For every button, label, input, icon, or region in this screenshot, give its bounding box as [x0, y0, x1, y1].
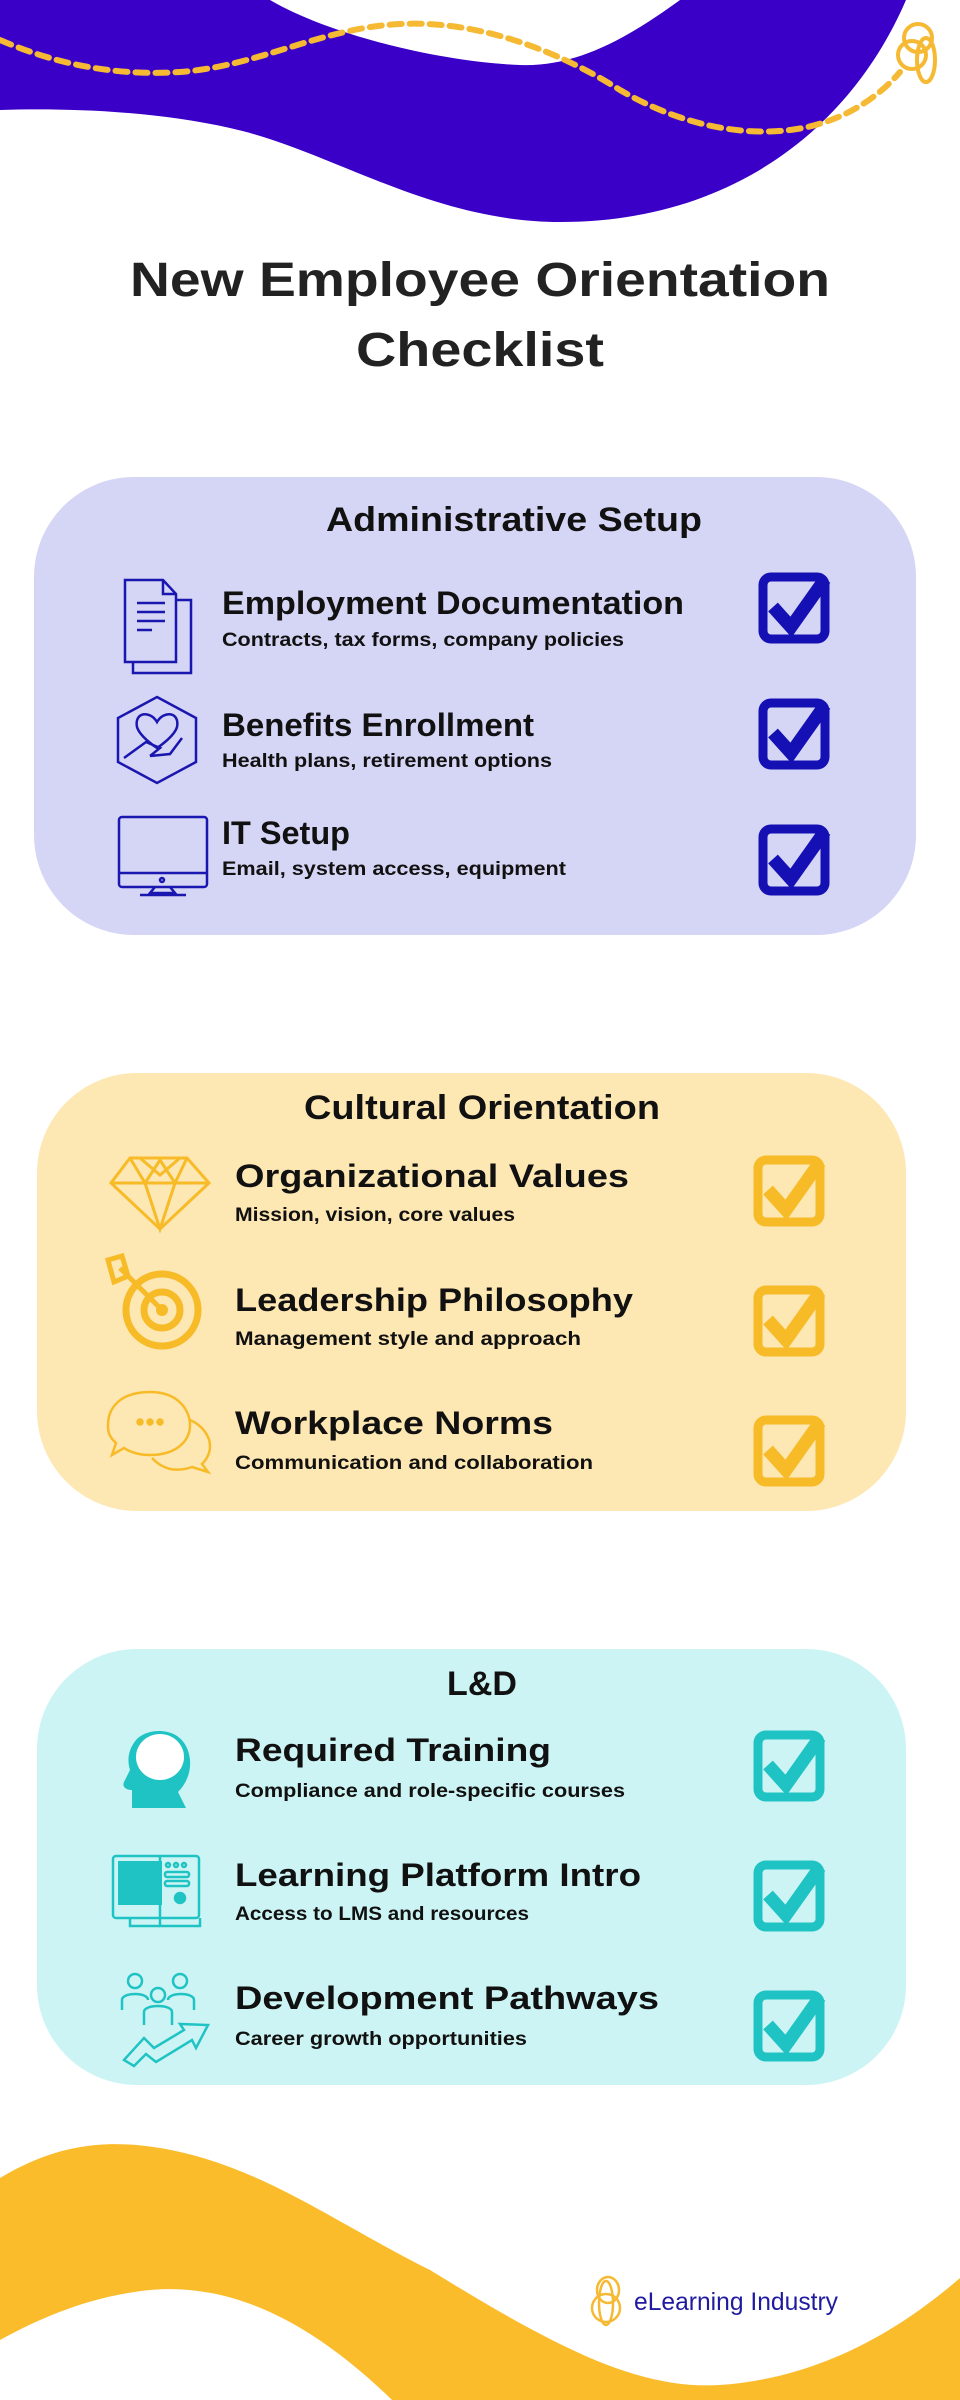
dashed path line: [0, 24, 900, 132]
text: workplace norms: Workplace Norms: [235, 1405, 553, 1441]
text: benefits enrollment: Benefits Enrollment: [222, 707, 534, 743]
icon: head: [123, 1731, 190, 1808]
panel: cultural orientation: Communication and collaboration: [235, 1453, 593, 1474]
panel: administrative setup: Contracts, tax forms, company policies: [222, 630, 624, 651]
text: employment documentation: Employment Documentation: [222, 585, 684, 621]
logo: eLearning Industry: [592, 2277, 838, 2325]
panel: administrative setup: [34, 477, 916, 935]
text: learning platform intro: Learning Platform Intro: [235, 1857, 641, 1893]
panel: L&D: [37, 1649, 906, 2085]
icon: people with growth arrow: [122, 1974, 208, 2066]
icon: top logo rings: [898, 24, 935, 82]
checkboxes: [758, 1160, 820, 1482]
panel: cultural orientation: Management style and approach: [235, 1329, 581, 1350]
text: organizational values: Organizational Values: [235, 1158, 629, 1194]
icon: target with arrow: [108, 1256, 198, 1346]
icon: heart in hand: [118, 697, 196, 783]
title: New Employee Orientation: [130, 254, 830, 307]
panel: L&D: Compliance and role-specific courses: [235, 1781, 625, 1802]
panel: administrative setup: Email, system access, equipment: [222, 859, 567, 880]
icon: document: [125, 580, 191, 673]
text: required training: Required Training: [235, 1732, 551, 1768]
panel: L&D: Access to LMS and resources: [235, 1904, 529, 1925]
text: leadership philosophy: Leadership Philosophy: [235, 1282, 633, 1318]
heading: cultural orientation: Cultural Orientation: [304, 1089, 660, 1127]
title: [130, 254, 830, 377]
bottom yellow wave: [0, 2144, 960, 2400]
panel: L&D: Career growth opportunities: [235, 2029, 527, 2050]
text: it setup: IT Setup: [222, 815, 350, 851]
title: Checklist: [356, 324, 604, 377]
text: development pathways: Development Pathways: [235, 1980, 659, 2016]
icon: speech bubbles: [108, 1392, 210, 1472]
panel: administrative setup: Health plans, retirement options: [222, 751, 552, 772]
icon: computer monitor: [119, 817, 207, 895]
checkboxes: [763, 577, 825, 891]
top purple wave: [0, 0, 906, 222]
checkboxes: [758, 1735, 820, 2057]
heading: administrative setup: Administrative Setup: [326, 501, 702, 539]
panel: cultural orientation: [37, 1073, 906, 1511]
icon: diamond: [111, 1158, 209, 1229]
logo: eLearning Industry: eLearning Industry: [634, 2288, 838, 2316]
heading: L&D: L&D: [447, 1665, 517, 1703]
icon: learning platform computer: [113, 1856, 200, 1926]
panel: cultural orientation: Mission, vision, core values: [235, 1205, 515, 1226]
